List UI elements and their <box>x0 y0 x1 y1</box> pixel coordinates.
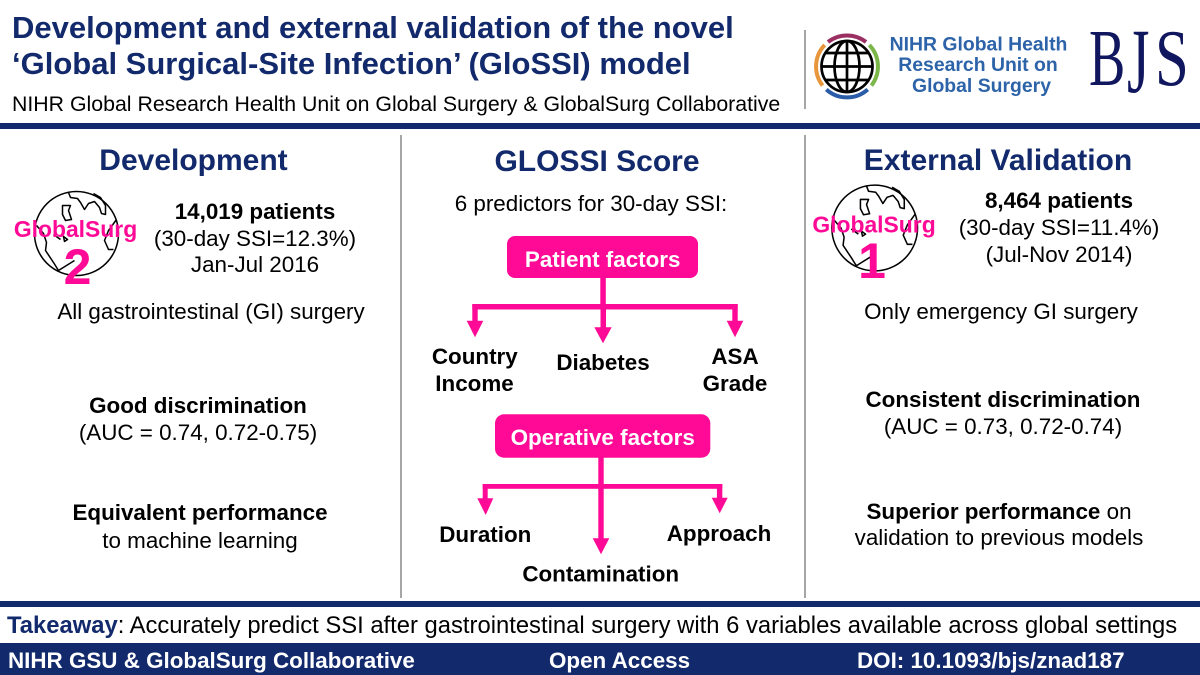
development heading: Development <box>99 144 288 177</box>
GLOSSI heading: GLOSSI Score <box>494 145 700 178</box>
icon: GlobalSurg 2 globe: 2 <box>64 239 91 295</box>
patient predictors: ASA <box>711 344 759 369</box>
validation performance: validation to previous models <box>855 525 1143 550</box>
column dividers <box>400 135 806 598</box>
operative predictors <box>439 521 771 586</box>
icon: NIHR globe logo <box>816 35 878 97</box>
operative factors box: Operative factors <box>511 425 695 450</box>
footer bar: NIHR GSU & GlobalSurg Collaborative <box>8 648 415 673</box>
icon: GlobalSurg 1 globe: GlobalSurg <box>812 212 936 238</box>
external validation heading: External Validation <box>864 144 1132 177</box>
icon: GlobalSurg 2 globe: GlobalSurg <box>14 216 137 242</box>
NIHR unit logo text: Global Surgery <box>912 75 1051 97</box>
icon: GlobalSurg 1 globe <box>812 185 936 289</box>
footer bar: DOI: 10.1093/bjs/znad187 <box>857 648 1125 673</box>
BJS journal logo: B <box>1089 14 1125 103</box>
NIHR unit logo text <box>890 34 1067 97</box>
validation cohort stats: 8,464 patients <box>985 188 1133 213</box>
operative predictors: Contamination <box>522 562 679 586</box>
patient predictors: Country <box>432 344 518 369</box>
development cohort stats <box>154 199 356 277</box>
development cohort stats: Jan-Jul 2016 <box>191 252 319 277</box>
patient predictors <box>432 344 767 396</box>
BJS journal logo <box>1089 10 1189 112</box>
operative factors arrows <box>477 457 728 554</box>
development performance <box>72 500 328 553</box>
subtitle: authors: NIHR Global Research Health Unit on Global Surgery & GlobalSurg Collaborative <box>12 92 780 116</box>
validation discrimination <box>866 387 1140 439</box>
BJS journal logo: J <box>1127 10 1149 112</box>
footer bar <box>0 643 1200 675</box>
operative predictors: Duration <box>439 522 531 547</box>
predictors intro: 6 predictors for 30-day SSI: <box>455 191 727 216</box>
development discrimination: (AUC = 0.74, 0.72-0.75) <box>79 420 317 445</box>
header divider <box>804 30 806 109</box>
NIHR unit logo text: Research Unit on <box>898 54 1058 76</box>
patient factors box: Patient factors <box>525 247 680 272</box>
validation cohort stats <box>959 188 1159 267</box>
patient predictors: Diabetes <box>556 350 650 375</box>
operative factors box <box>495 414 710 458</box>
footer bar: Open Access <box>549 648 690 673</box>
BJS journal logo: S <box>1155 15 1189 103</box>
development performance: to machine learning <box>102 528 298 553</box>
NIHR unit logo text: NIHR Global Health <box>890 34 1067 56</box>
panel: development <box>14 144 365 553</box>
patient predictors: Grade <box>703 371 767 396</box>
development discrimination: Good discrimination <box>89 393 307 418</box>
patient factors arrows <box>467 277 743 343</box>
operative predictors: Approach <box>667 521 771 546</box>
title: Development and external validation of the novel <box>12 10 734 45</box>
title <box>12 10 734 81</box>
lower rule <box>0 601 1200 607</box>
title: ‘Global Surgical-Site Infection’ (GloSSI) model <box>12 46 691 81</box>
validation cohort stats: (30-day SSI=11.4%) <box>959 215 1159 240</box>
icon: GlobalSurg 1 globe: 1 <box>858 233 886 289</box>
validation performance <box>855 499 1143 550</box>
validation scope: Only emergency GI surgery <box>864 299 1139 324</box>
development cohort stats: (30-day SSI=12.3%) <box>154 226 356 251</box>
development discrimination <box>79 393 317 445</box>
validation cohort stats: (Jul-Nov 2014) <box>986 242 1132 267</box>
validation discrimination: Consistent discrimination <box>866 387 1140 412</box>
patient predictors: Income <box>435 371 514 396</box>
validation discrimination: (AUC = 0.73, 0.72-0.74) <box>884 414 1122 439</box>
panel: external validation <box>812 144 1159 550</box>
header rule <box>0 123 1200 129</box>
validation performance: Superior performance on <box>866 499 1132 524</box>
patient factors box <box>507 236 698 278</box>
development cohort stats: 14,019 patients <box>175 199 335 224</box>
development scope: All gastrointestinal (GI) surgery <box>57 299 365 324</box>
takeaway: Takeaway: Accurately predict SSI after gastrointestinal surgery with 6 variables available across global settings <box>7 612 1177 639</box>
development performance: Equivalent performance <box>72 500 328 525</box>
panel: GLOSSI score <box>432 145 771 586</box>
icon: GlobalSurg 2 globe <box>14 192 137 295</box>
